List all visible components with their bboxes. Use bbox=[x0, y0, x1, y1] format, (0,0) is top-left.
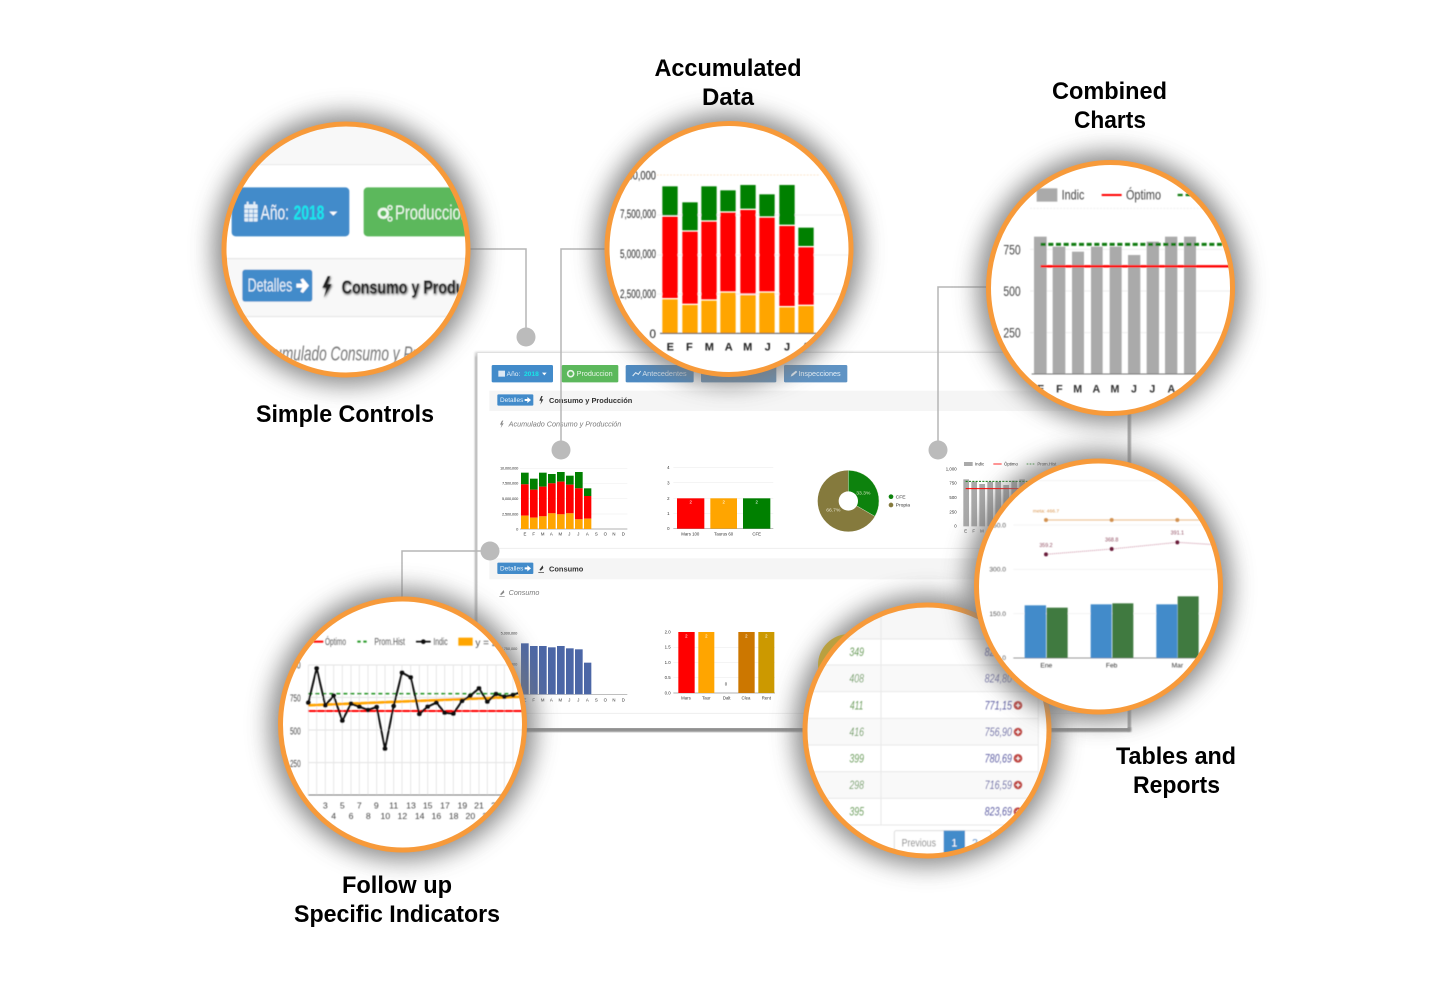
stacked bar chart: J bbox=[784, 341, 790, 353]
bar chart: count by supplier: 4 bbox=[667, 465, 670, 470]
bar chart: consumption: M bbox=[559, 697, 563, 702]
combined chart: 750 bbox=[1003, 241, 1021, 257]
stacked bar chart: accumulated: E bbox=[524, 531, 527, 536]
stacked bar chart: accumulated: M bbox=[559, 531, 563, 536]
legend: Óptimo bbox=[325, 635, 346, 648]
heading: Accumulated Data: Data bbox=[702, 84, 755, 111]
combo chart: 391.1 bbox=[1171, 531, 1184, 537]
bar chart: count by supplier: 2 bbox=[667, 496, 670, 501]
connector: specific indicators bbox=[402, 542, 500, 600]
line chart: 5 bbox=[340, 800, 345, 810]
combo chart bbox=[989, 508, 1211, 668]
bar chart: consumption: M bbox=[541, 697, 545, 702]
heading: Follow up Specific Indicators: Follow up bbox=[342, 872, 452, 899]
button row: Antecedentes bbox=[642, 371, 687, 378]
stacked bar chart: 5,000,000 bbox=[620, 248, 656, 261]
combined chart thumbnail: 0 bbox=[954, 524, 957, 529]
data table: 716,59 bbox=[985, 778, 1012, 792]
stacked bar chart: accumulated: N bbox=[612, 531, 616, 536]
bar chart: consumption: E bbox=[524, 697, 527, 702]
legend: Indic bbox=[1062, 186, 1084, 202]
heading: Combined Charts: Charts bbox=[1074, 107, 1146, 134]
combined chart: A bbox=[1167, 383, 1175, 395]
stacked bar chart: M bbox=[705, 341, 714, 353]
data table: 780,69 bbox=[985, 751, 1012, 765]
data table: 823,69 bbox=[985, 804, 1012, 818]
magnifier: combined charts bbox=[978, 152, 1245, 424]
combined chart thumbnail: Prom.Hist bbox=[1037, 462, 1057, 467]
stacked bar chart: accumulated: 2,500,000 bbox=[502, 511, 519, 516]
combined chart thumbnail: Indic bbox=[975, 462, 985, 467]
stacked bar chart: accumulated: 0 bbox=[516, 527, 519, 532]
donut chart: 33.3% bbox=[856, 490, 871, 496]
magnifier: specific indicators bbox=[270, 588, 536, 860]
line chart: 11 bbox=[389, 800, 398, 810]
button row bbox=[492, 365, 847, 382]
line chart: 22 bbox=[483, 811, 492, 821]
stacked bar chart: accumulated: O bbox=[604, 531, 608, 536]
bar chart: consumption by supplier: Rent bbox=[762, 696, 772, 701]
bar chart: consumption by supplier: Mars bbox=[681, 696, 691, 701]
line chart: 14 bbox=[415, 811, 425, 821]
line chart: 1,000 bbox=[283, 660, 301, 671]
donut chart: 66.7% bbox=[826, 507, 841, 513]
stacked bar chart: A bbox=[802, 341, 810, 353]
button: year selector bbox=[232, 187, 349, 236]
button row: Inspecciones bbox=[798, 371, 841, 378]
heading: Accumulated Data bbox=[654, 55, 802, 111]
magnifier: accumulated data bbox=[596, 113, 862, 385]
bar chart: consumption by supplier: 2.0 bbox=[665, 629, 671, 634]
stacked bar chart: F bbox=[686, 341, 693, 353]
line chart: 250 bbox=[290, 759, 301, 770]
line chart: 3 bbox=[323, 800, 328, 810]
button row: Produccion bbox=[577, 371, 613, 378]
button row: Año: bbox=[507, 371, 521, 378]
bar chart: consumption by supplier: Clea bbox=[742, 696, 751, 701]
magnifier: reports chart bbox=[966, 450, 1232, 722]
data table: 399 bbox=[849, 751, 864, 765]
bar chart: consumption by supplier: 0.0 bbox=[665, 690, 671, 695]
combo chart: 359.2 bbox=[1039, 543, 1053, 549]
line chart bbox=[283, 660, 524, 821]
pagination bbox=[894, 830, 992, 852]
donut chart bbox=[818, 470, 910, 532]
stacked bar chart: accumulated: J bbox=[568, 531, 570, 536]
connector: simple controls bbox=[468, 249, 536, 346]
bar chart: consumption: A bbox=[550, 697, 553, 702]
bar chart: consumption by supplier: 0 bbox=[725, 682, 728, 687]
button: production bbox=[364, 187, 477, 236]
bar chart: consumption: A bbox=[586, 697, 589, 702]
data table: 298 bbox=[849, 778, 864, 792]
bar chart: consumption by supplier: 1.0 bbox=[665, 660, 671, 665]
combo chart: 0.0 bbox=[997, 655, 1006, 662]
heading: Accumulated Data: Accumulated bbox=[654, 55, 802, 82]
stacked bar chart: accumulated: M bbox=[541, 531, 545, 536]
data table: 408 bbox=[849, 672, 864, 686]
stacked bar chart: E bbox=[667, 341, 674, 353]
line chart: 19 bbox=[458, 800, 467, 810]
heading: Combined Charts: Combined bbox=[1052, 78, 1167, 105]
stacked bar chart: 7,500,000 bbox=[620, 208, 656, 221]
data table: 756,90 bbox=[985, 725, 1012, 739]
line chart: 500 bbox=[290, 726, 301, 737]
bar chart: count by supplier: CFE bbox=[752, 532, 761, 537]
bar chart: consumption: F bbox=[532, 697, 535, 702]
combo chart: Mar bbox=[1172, 663, 1184, 670]
bar chart: count by supplier: 1 bbox=[667, 511, 670, 516]
bar chart: consumption by supplier: 2 bbox=[705, 633, 708, 638]
stacked bar chart: accumulated: 10,000,000 bbox=[500, 466, 519, 471]
section header: Consumo y Producción bbox=[489, 391, 1109, 411]
combo chart: 450.0 bbox=[989, 522, 1006, 529]
subtitle: Acumulado Consumo y Producción bbox=[258, 343, 472, 365]
stacked bar chart: accumulated: J bbox=[577, 531, 579, 536]
data table: 349 bbox=[849, 645, 864, 659]
combined chart thumbnail: 750 bbox=[949, 481, 957, 486]
stacked bar chart: accumulated bbox=[500, 466, 627, 536]
line chart: 10 bbox=[381, 811, 390, 821]
line chart: 4 bbox=[331, 811, 336, 821]
magnifier: simple controls bbox=[213, 114, 502, 386]
pagination: 2 bbox=[972, 838, 978, 850]
bar chart: consumption: D bbox=[622, 697, 625, 702]
bar chart: consumption: N bbox=[612, 697, 616, 702]
stacked bar chart: accumulated: 7,500,000 bbox=[502, 481, 519, 486]
section header: Consumo: Consumo bbox=[549, 565, 584, 574]
data table: 416 bbox=[849, 725, 864, 739]
bar chart: consumption by supplier: Dalt bbox=[723, 696, 731, 701]
button: year selector: 2018 bbox=[294, 203, 324, 225]
bar chart: count by supplier bbox=[667, 465, 773, 537]
donut chart: CFE bbox=[896, 494, 906, 500]
combined chart thumbnail: E bbox=[964, 529, 967, 534]
connector: combined charts bbox=[928, 287, 988, 460]
bar chart: count by supplier: 2 bbox=[722, 499, 725, 504]
combined chart thumbnail: 1,000 bbox=[946, 466, 957, 471]
button: production: Produccion bbox=[395, 203, 469, 225]
stacked bar chart: accumulated: A bbox=[586, 531, 589, 536]
combined chart: E bbox=[1037, 383, 1044, 395]
donut chart: Propia bbox=[896, 503, 910, 509]
bar chart: consumption: O bbox=[604, 697, 608, 702]
subtitle: Consumo: Consumo bbox=[509, 590, 539, 597]
stacked bar chart: accumulated: 5,000,000 bbox=[502, 496, 519, 501]
section header: Consumo bbox=[489, 558, 1109, 579]
data table: 821,30 bbox=[985, 645, 1012, 659]
bar chart: consumption: 3,750,000 bbox=[501, 646, 518, 651]
button: details bbox=[242, 270, 312, 302]
bar chart: consumption by supplier: Taur bbox=[702, 696, 711, 701]
button: details: Detalles bbox=[248, 275, 292, 296]
combined chart thumbnail bbox=[946, 462, 1057, 534]
stacked bar chart: 2,500,000 bbox=[620, 288, 656, 301]
bar chart: consumption bbox=[501, 631, 627, 702]
combined chart thumbnail: M bbox=[980, 529, 984, 534]
stacked bar chart: accumulated: A bbox=[550, 531, 553, 536]
magnifier: table bbox=[794, 594, 1060, 866]
combo chart: Feb bbox=[1106, 663, 1118, 670]
bar chart: consumption: J bbox=[577, 697, 579, 702]
data table: 824,80 bbox=[985, 672, 1012, 686]
line chart: 15 bbox=[423, 800, 433, 810]
connector: accumulated data bbox=[552, 249, 606, 460]
combined chart: J bbox=[1131, 383, 1137, 395]
combo chart: meta: 466.7 bbox=[1033, 508, 1059, 514]
stacked bar chart: 10,000,000 bbox=[609, 169, 656, 182]
legend bbox=[313, 635, 498, 649]
line chart: 750 bbox=[290, 693, 301, 704]
combo chart: 300.0 bbox=[989, 566, 1006, 573]
heading: Consumo y Producción bbox=[322, 276, 502, 297]
line chart: 23 bbox=[491, 800, 501, 810]
line chart: 8 bbox=[366, 811, 371, 821]
legend: Óptimo bbox=[1126, 186, 1161, 202]
stacked bar chart: 0 bbox=[650, 328, 657, 341]
heading: Tables and Reports: Tables and bbox=[1116, 743, 1236, 770]
stacked bar chart: A bbox=[725, 341, 733, 353]
legend: y = 2 bbox=[475, 638, 498, 649]
data table: 395 bbox=[849, 804, 864, 818]
stacked bar chart bbox=[609, 169, 853, 353]
combined chart thumbnail: 250 bbox=[949, 509, 957, 514]
combo chart: 368.8 bbox=[1105, 537, 1118, 543]
line chart: 12 bbox=[398, 811, 407, 821]
bar chart: count by supplier: Mars 100 bbox=[681, 532, 700, 537]
section header: Consumo y Producción: Consumo y Producción bbox=[549, 396, 633, 405]
bar chart: consumption by supplier: 0.5 bbox=[665, 675, 671, 680]
line chart: 21 bbox=[474, 800, 484, 810]
stacked bar chart: accumulated: D bbox=[622, 531, 625, 536]
heading: Tables and Reports bbox=[1116, 743, 1236, 799]
combined chart: 250 bbox=[1003, 325, 1021, 341]
line chart: 18 bbox=[449, 811, 459, 821]
stacked bar chart: J bbox=[765, 341, 771, 353]
line chart: 7 bbox=[357, 800, 362, 810]
subtitle: Acumulado Consumo y Producción: Acumulado Consumo y Producción bbox=[508, 421, 621, 428]
bar chart: consumption by supplier bbox=[665, 629, 775, 701]
combined chart thumbnail: 500 bbox=[949, 495, 957, 500]
bar chart: count by supplier: 2 bbox=[755, 499, 758, 504]
data table bbox=[808, 616, 1039, 826]
combined chart bbox=[1003, 208, 1233, 395]
combined chart: M bbox=[1111, 383, 1120, 395]
bar chart: count by supplier: 3 bbox=[667, 480, 670, 485]
bar chart: consumption by supplier: 1.5 bbox=[665, 645, 671, 650]
pagination: Previous bbox=[902, 838, 936, 850]
data table: 411 bbox=[850, 698, 863, 712]
data table: 771,15 bbox=[985, 698, 1012, 712]
heading: Simple Controls: Simple Controls bbox=[256, 401, 434, 428]
stacked bar chart: M bbox=[743, 341, 752, 353]
bar chart: consumption: 2,500,000 bbox=[501, 661, 518, 666]
combined chart: J bbox=[1149, 383, 1155, 395]
line chart: 13 bbox=[406, 800, 416, 810]
heading: Combined Charts bbox=[1052, 78, 1167, 134]
bar chart: consumption: 5,000,000 bbox=[501, 631, 518, 636]
section header: Consumo y Producción: Detalles bbox=[500, 397, 524, 404]
section header: Consumo: Detalles bbox=[500, 565, 524, 572]
stacked bar chart: accumulated: S bbox=[595, 531, 598, 536]
heading: Follow up Specific Indicators bbox=[294, 872, 500, 928]
legend bbox=[1037, 186, 1200, 202]
bar chart: consumption: J bbox=[568, 697, 570, 702]
heading: Consumo y Producción: Consumo y Producción bbox=[342, 276, 502, 297]
button row: 2018 bbox=[524, 371, 539, 378]
line chart: 6 bbox=[349, 811, 354, 821]
line chart: 9 bbox=[374, 800, 379, 810]
combined chart: M bbox=[1073, 383, 1082, 395]
combined chart thumbnail: F bbox=[972, 529, 975, 534]
combined chart: F bbox=[1056, 383, 1063, 395]
combo chart: 150.0 bbox=[989, 611, 1006, 618]
bar chart: count by supplier: 0 bbox=[667, 526, 670, 531]
line chart: 17 bbox=[440, 800, 450, 810]
bar chart: consumption by supplier: 2 bbox=[745, 633, 748, 638]
line chart: 16 bbox=[432, 811, 441, 821]
button: year selector: Año: bbox=[261, 203, 289, 225]
legend: Prom.Hist bbox=[374, 637, 405, 648]
combined chart: A bbox=[1092, 383, 1100, 395]
legend: Indic bbox=[433, 637, 448, 648]
bar chart: consumption: S bbox=[595, 697, 598, 702]
bar chart: count by supplier: 2 bbox=[689, 499, 692, 504]
heading: Tables and Reports: Reports bbox=[1133, 772, 1220, 799]
line chart: 20 bbox=[466, 811, 475, 821]
bar chart: consumption by supplier: 2 bbox=[765, 633, 768, 638]
dashboard window bbox=[475, 352, 1131, 732]
combo chart: Ene bbox=[1040, 663, 1053, 670]
combined chart thumbnail: Óptimo bbox=[1004, 462, 1019, 467]
bar chart: consumption by supplier: 2 bbox=[685, 633, 688, 638]
bar chart: count by supplier: Taurus 60 bbox=[714, 532, 734, 537]
combined chart: 500 bbox=[1003, 283, 1021, 299]
pagination: 1 bbox=[951, 838, 957, 850]
heading: Follow up Specific Indicators: Specific Indicators bbox=[294, 901, 500, 928]
stacked bar chart: accumulated: F bbox=[532, 531, 535, 536]
